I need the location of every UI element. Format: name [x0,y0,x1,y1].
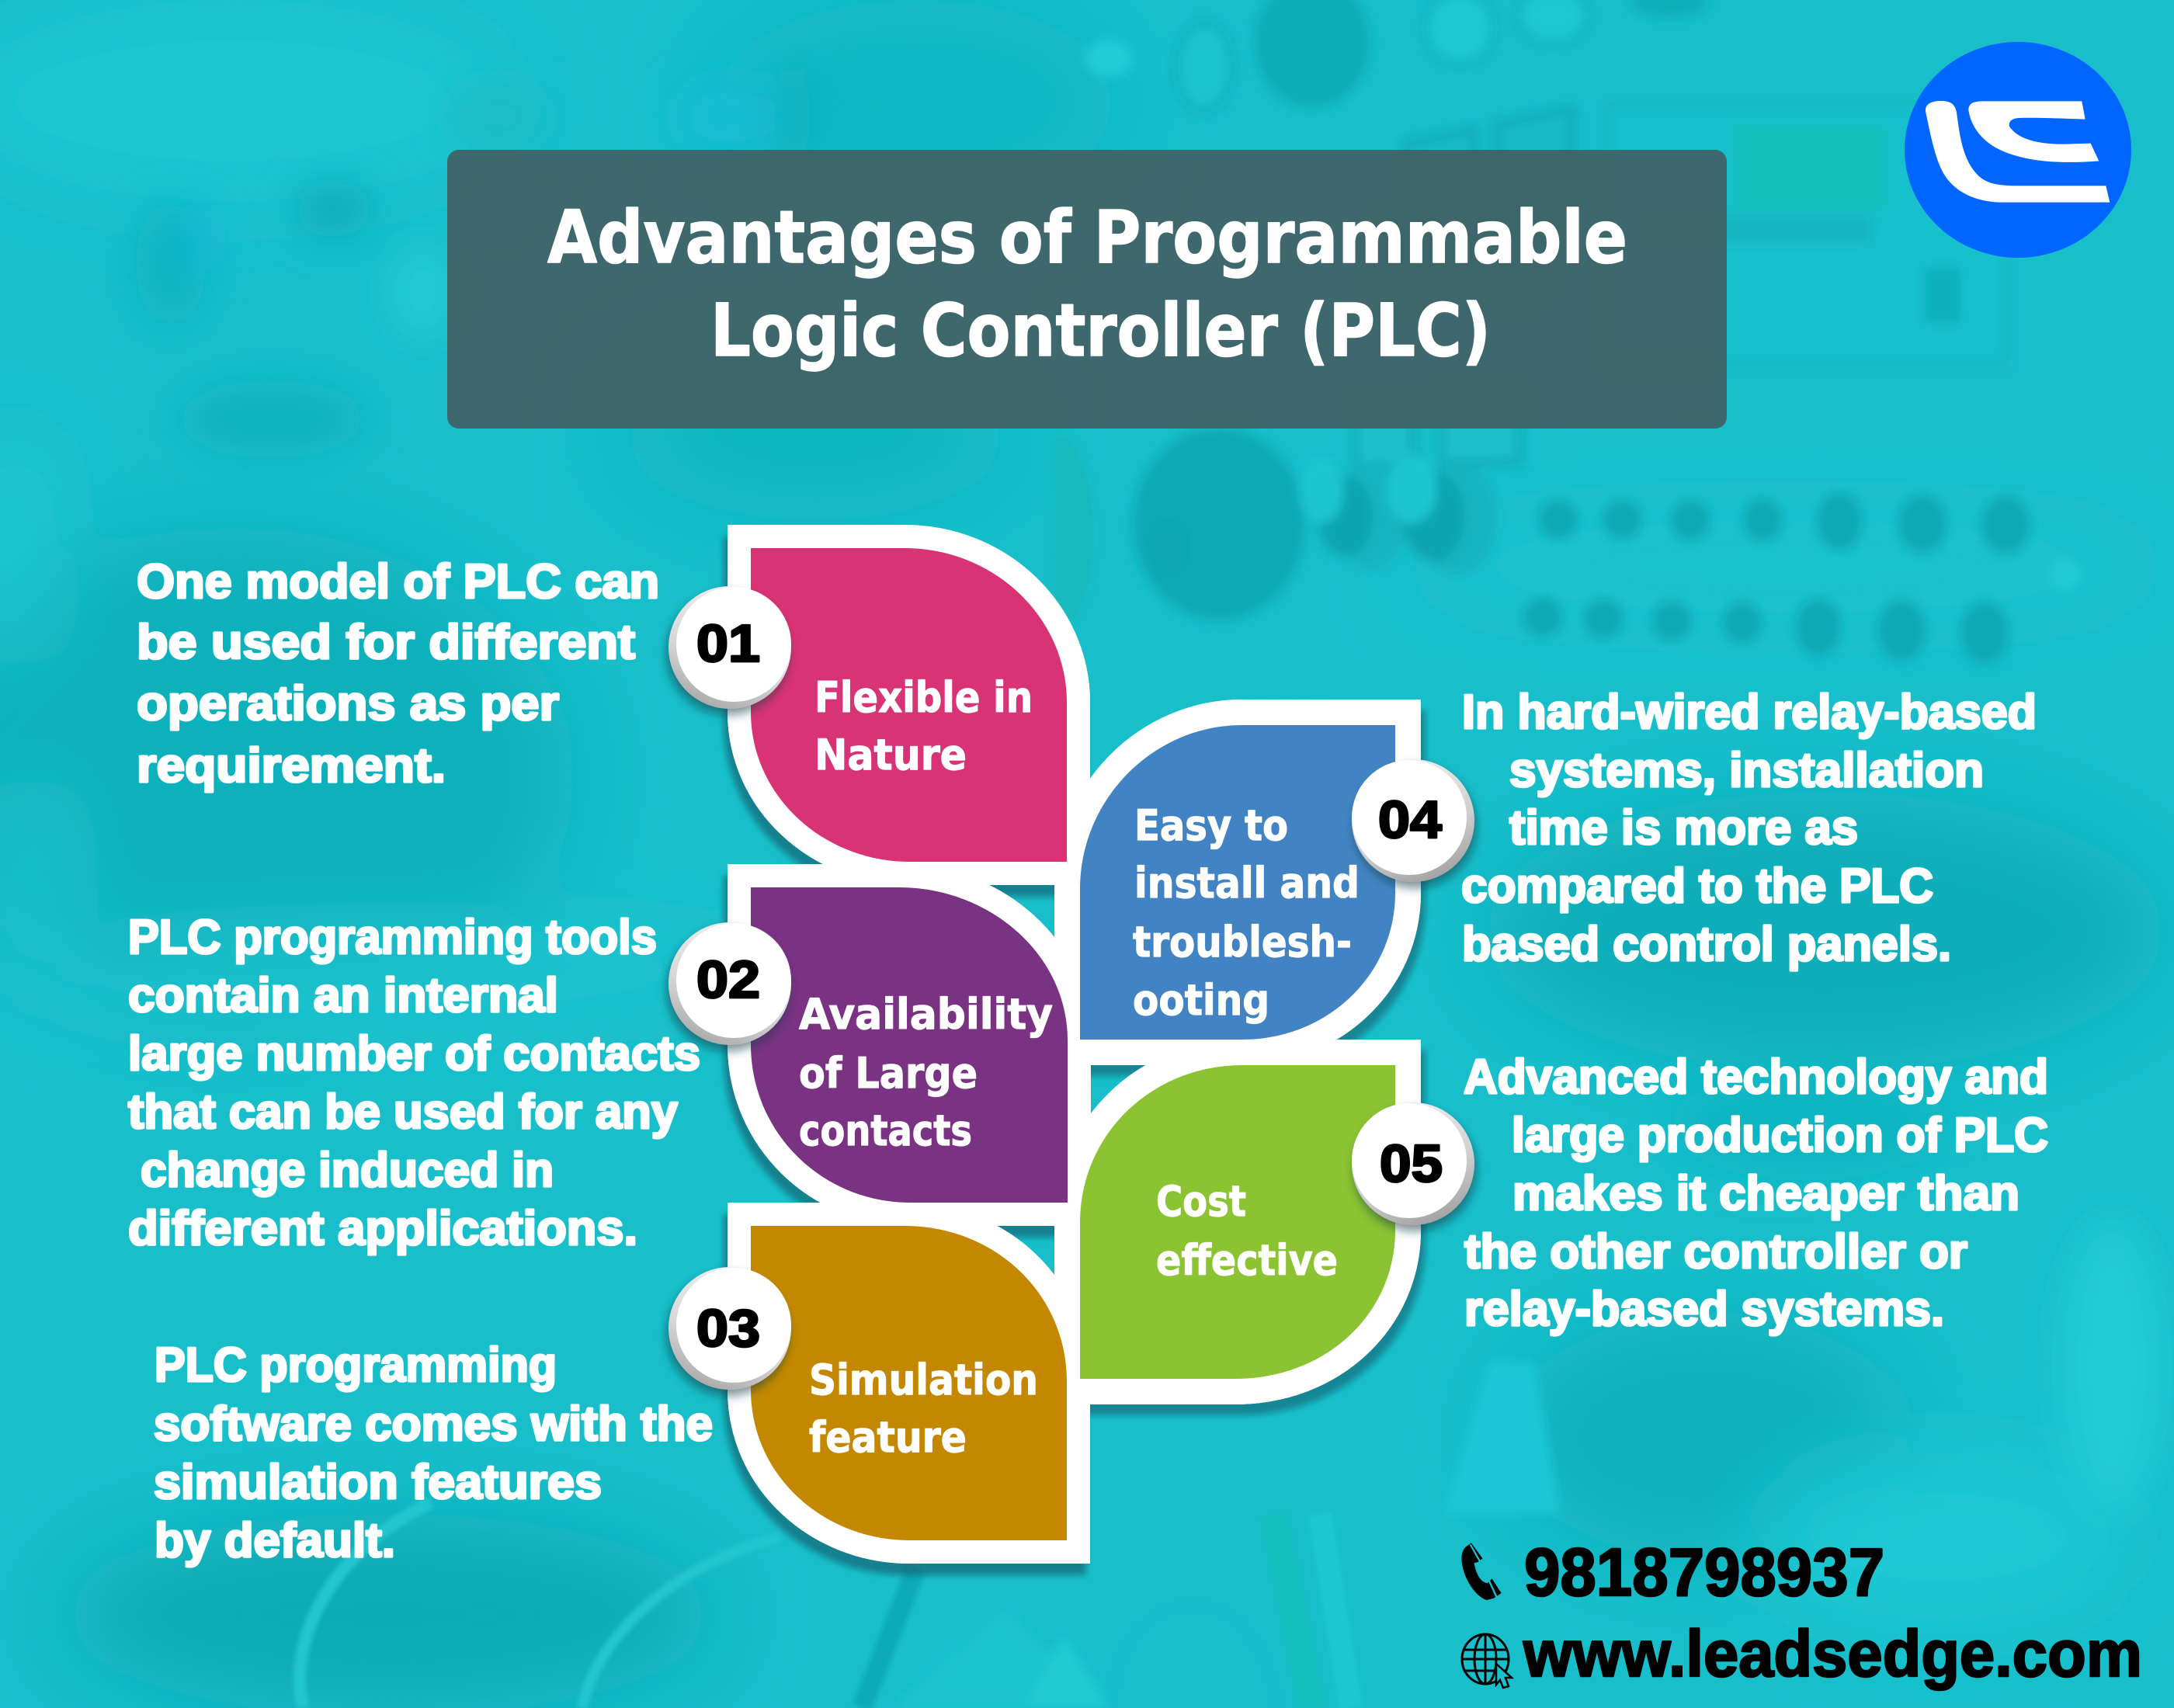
text block 04: In hard-wired relay-based [1462,686,2037,739]
text block 03: simulation features [154,1456,602,1509]
window switches behind the title panel [1405,129,1475,225]
leaf 02: Availability of Large contacts [751,887,1068,1203]
leaf 05: Cost effective: Cost [1156,1177,1246,1226]
leaf 04: Easy to install and troubleshooting: install and [1134,859,1360,908]
leaf 04: Easy to install and troubleshooting [1080,725,1395,1040]
text block 03: PLC programming [155,1338,557,1392]
text block 05: large production of PLC [1512,1109,2048,1162]
text block 02: different applications. [128,1202,637,1255]
leaf 03: Simulation feature: Simulation [809,1356,1038,1404]
title text: Logic Controller (PLC) [710,289,1491,373]
number badge 01 [669,586,791,709]
leaf 03: Simulation feature [751,1226,1067,1540]
text block 01: One model of PLC can [137,555,659,609]
number badge 03 [669,1267,791,1390]
number badge 01: 01 [696,614,760,673]
leaf 02: Availability of Large contacts: Availability [799,990,1053,1039]
leaf 04: Easy to install and troubleshooting: ooting [1133,976,1269,1025]
text block 05: relay-based systems. [1464,1283,1944,1336]
number badge 04: 04 [1378,790,1442,849]
leaf 05: Cost effective: effective [1156,1236,1338,1285]
leaf 01: Flexible in Nature: Flexible in [814,673,1033,722]
title text: Advantages of Programmable [547,196,1627,280]
number badge 02: 02 [696,950,760,1009]
leaf 05: Cost effective [1080,1065,1395,1379]
text block 05: Advanced technology and [1464,1050,2048,1104]
leaf 01: Flexible in Nature [751,548,1067,862]
number badge 05 [1352,1102,1474,1225]
number badge 02 [669,922,791,1045]
logo: blue circle with white LE monogram [1905,42,2131,258]
cables [300,1502,431,1708]
top knobs [1253,0,1371,109]
number badge 04 [1352,759,1474,882]
text block 01: operations as per [137,677,559,731]
number badge 05: 05 [1380,1134,1443,1193]
text block 04: time is more as [1509,801,1858,855]
phone number: 9818798937 [1524,1535,1884,1610]
indicator lamps [1523,492,2030,664]
white leaf outlines with drop shadows [751,548,1395,1540]
text block 03: software comes with the [154,1397,713,1451]
text block 04: based control panels. [1462,918,1951,971]
icon: globe with cursor [1462,1634,1512,1688]
leaf 02: Availability of Large contacts: of Large [799,1049,978,1098]
leaf 04: Easy to install and troubleshooting: Easy to [1134,801,1288,850]
selector switches [1132,427,1306,621]
text block 01: be used for different [137,616,635,669]
text block 02: change induced in [141,1144,554,1197]
website url: www.leadsedge.com [1523,1617,2142,1690]
text block 05: the other controller or [1464,1225,1967,1279]
text block 03: by default. [155,1514,395,1567]
leaf 01: Flexible in Nature: Nature [814,731,967,779]
text block 02: large number of contacts [128,1027,700,1081]
text block 02: PLC programming tools [128,911,657,964]
leaf 04: Easy to install and troubleshooting: troublesh- [1133,918,1352,967]
display frame [1607,105,2007,365]
number badge 03: 03 [696,1299,760,1358]
leaf 03: Simulation feature: feature [809,1413,967,1462]
text block 02: contain an internal [128,969,558,1022]
text block 01: requirement. [137,739,446,793]
text block 02: that can be used for any [128,1085,679,1139]
icon: telephone handset [1461,1543,1502,1600]
leaf 02: Availability of Large contacts: contacts [799,1106,972,1155]
text block 04: compared to the PLC [1461,859,1933,913]
text block 04: systems, installation [1509,744,1984,797]
title panel [447,150,1727,429]
text block 05: makes it cheaper than [1512,1167,2019,1220]
